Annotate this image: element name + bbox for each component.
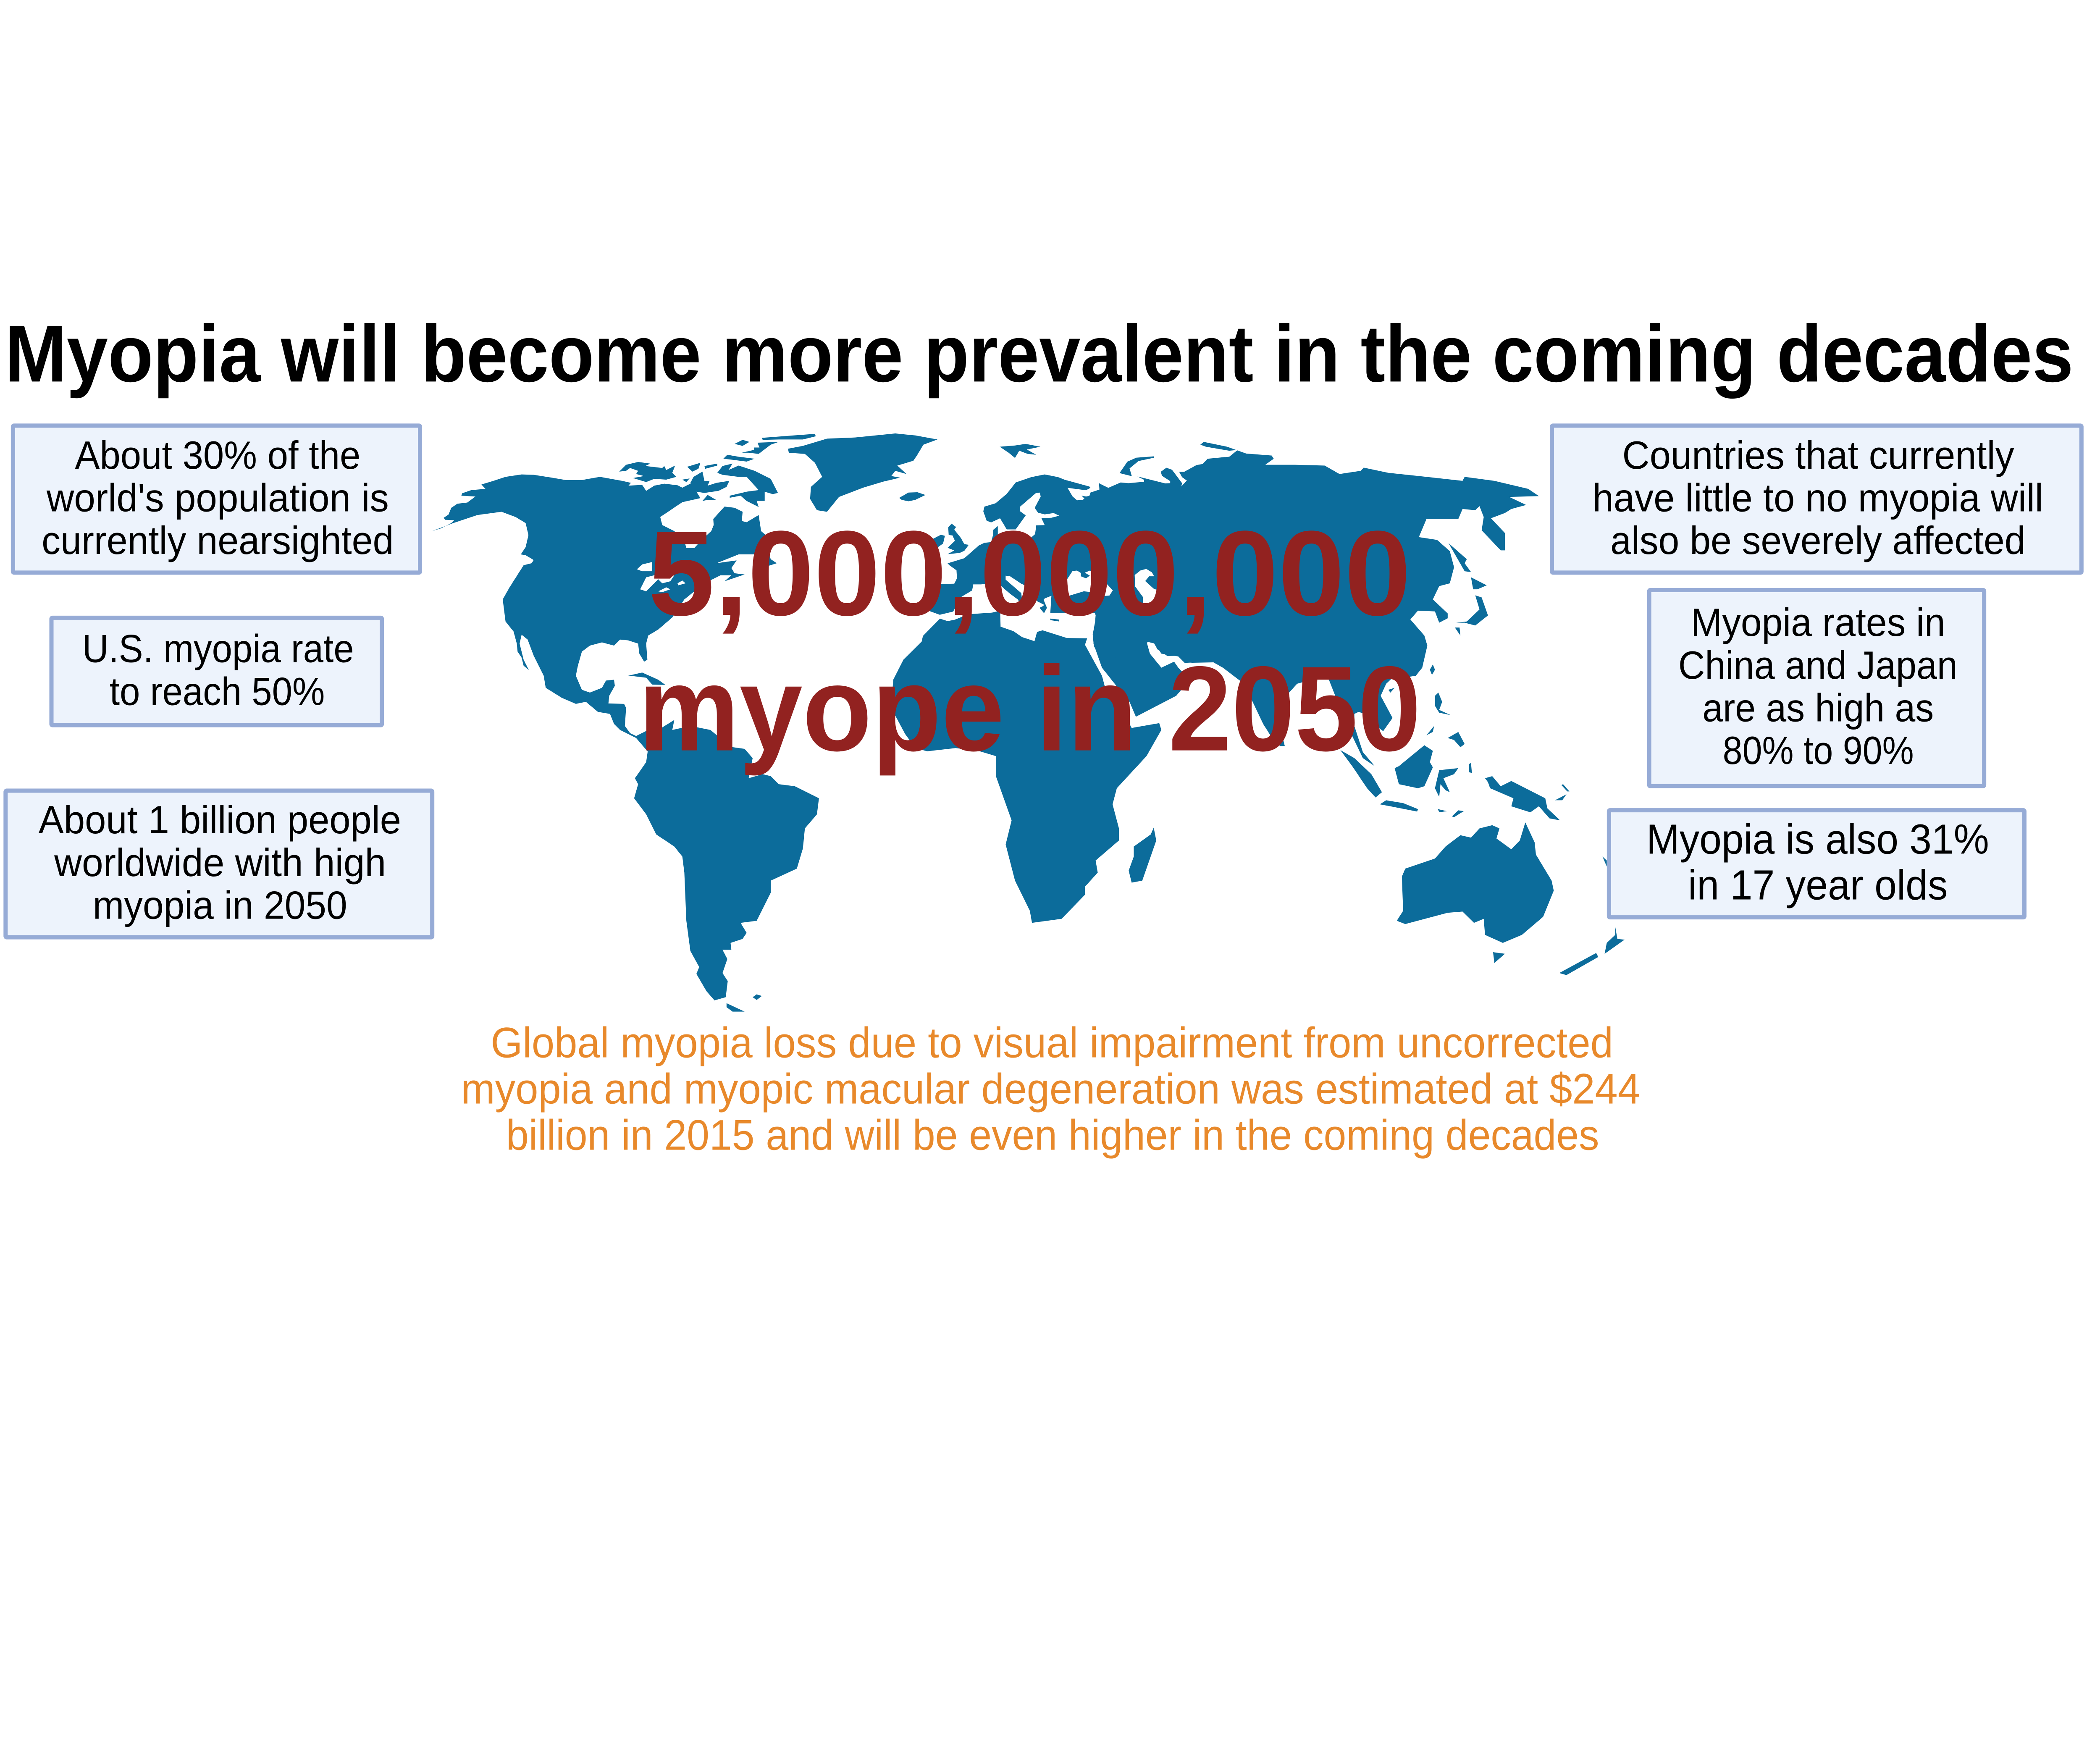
callout: China and Japan: 80% to 90%: [1723, 728, 1914, 772]
callout: U.S. rate: U.S. myopia rate: [82, 627, 354, 671]
cost note: myopia and myopic macular degeneration was estimated at $244: [461, 1065, 1641, 1113]
callout: countries affected: also be severely affected: [1610, 518, 2026, 562]
callout: countries affected: have little to no myopia will: [1593, 475, 2043, 520]
callout: 1 billion: About 1 billion people: [39, 798, 401, 842]
headline figure: [638, 506, 1421, 777]
callout: China and Japan: Myopia rates in: [1691, 600, 1945, 644]
callout: countries affected: Countries that currently: [1622, 433, 2014, 477]
callout: 17 year olds: in 17 year olds: [1688, 862, 1948, 909]
cost note: [461, 1019, 1641, 1159]
callout: 1 billion: myopia in 2050: [93, 883, 347, 927]
callout: 17 year olds: Myopia is also 31%: [1646, 816, 1989, 863]
callout: 17 year olds: [1609, 810, 2024, 917]
headline figure: 5,000,000,000: [648, 506, 1411, 640]
world map: [432, 433, 1625, 1012]
callout: 30% nearsighted: About 30% of the: [75, 433, 360, 477]
callout: China and Japan: are as high as: [1702, 686, 1934, 730]
callout: China and Japan: [1649, 590, 1984, 786]
callout: 30% nearsighted: world's population is: [46, 475, 389, 520]
title: Myopia will become more prevalent in the coming decades: [5, 309, 2074, 399]
map: Americas and Greenland: [432, 433, 937, 1012]
callout: 30% nearsighted: currently nearsighted: [42, 518, 394, 562]
callout: countries affected: [1552, 425, 2082, 572]
map: Africa, Asia and Oceania: [891, 442, 1625, 975]
callout: 30% nearsighted: [13, 425, 420, 572]
cost note: Global myopia loss due to visual impairment from uncorrected: [491, 1019, 1613, 1067]
map: Europe and Middle East detail: [899, 457, 1225, 665]
callout: China and Japan: China and Japan: [1678, 643, 1958, 687]
callout: U.S. rate: to reach 50%: [110, 669, 325, 713]
callout: U.S. rate: [51, 618, 382, 725]
headline figure: myope in 2050: [638, 641, 1421, 777]
cost note: billion in 2015 and will be even higher in the coming decades: [506, 1111, 1599, 1159]
callout: 1 billion: worldwide with high: [54, 840, 386, 885]
callout: 1 billion: [5, 790, 432, 937]
